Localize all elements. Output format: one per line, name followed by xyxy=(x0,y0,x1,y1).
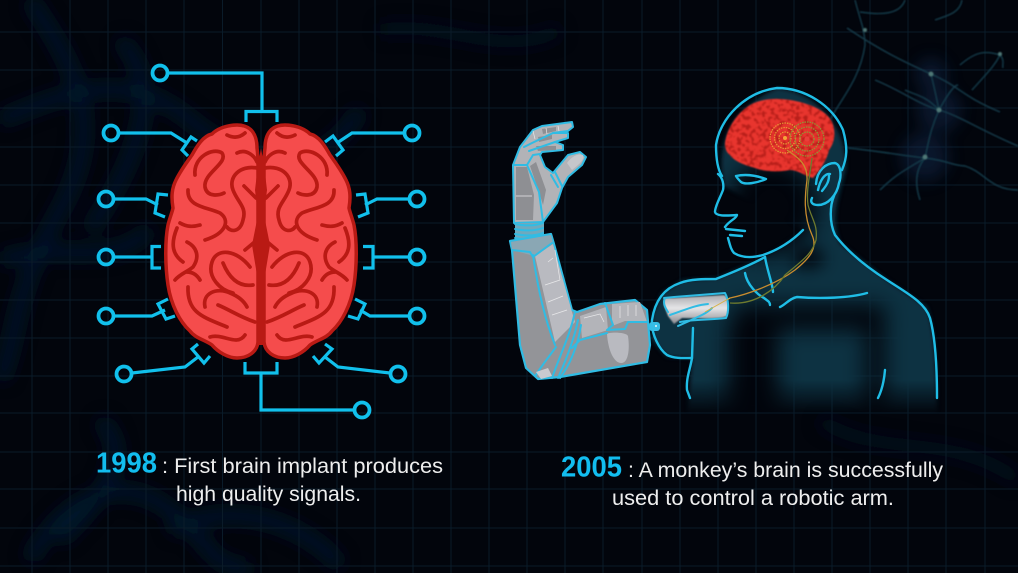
brain circuit illustration xyxy=(98,66,424,418)
wires to implant xyxy=(707,150,816,310)
body glow xyxy=(652,88,937,420)
left hemisphere xyxy=(166,125,258,358)
caption 2005 xyxy=(561,452,943,510)
caption 1998: : First brain implant produces xyxy=(162,454,443,478)
caption 2005: 2005 xyxy=(561,452,622,484)
hand xyxy=(513,122,586,223)
forearm xyxy=(510,234,650,379)
caption 1998: high quality signals. xyxy=(176,482,361,506)
caption 2005: used to control a robotic arm. xyxy=(612,486,894,510)
shoulder connector xyxy=(649,322,660,331)
human figure xyxy=(652,88,937,420)
caption 1998 xyxy=(96,448,443,506)
caption 1998: 1998 xyxy=(96,448,157,480)
head brain xyxy=(725,99,834,178)
central fissure xyxy=(252,148,270,345)
implant on shoulder xyxy=(664,293,730,326)
circuit connectors xyxy=(98,66,424,418)
robotic arm xyxy=(510,122,660,379)
caption 2005: : A monkey’s brain is successfully xyxy=(628,458,943,482)
neurons top right xyxy=(830,0,1018,200)
right hemisphere xyxy=(264,125,356,358)
signal rings xyxy=(770,122,824,156)
wrist xyxy=(515,223,544,240)
head and torso outlines xyxy=(652,88,937,398)
